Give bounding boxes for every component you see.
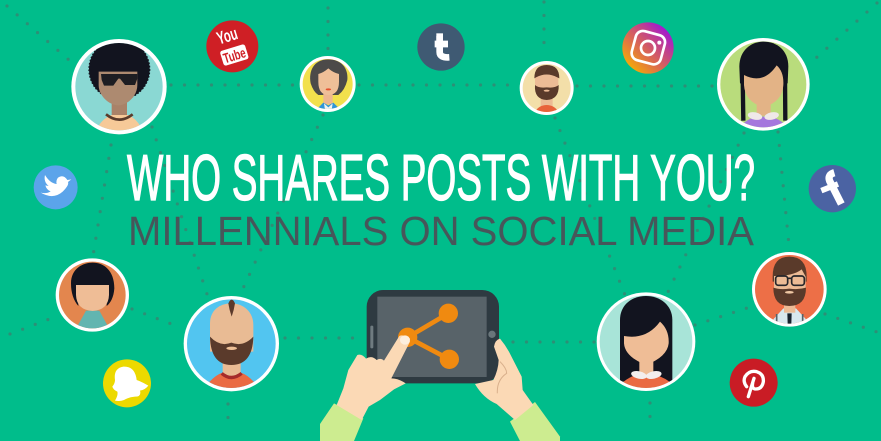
- tablet and hands: [320, 290, 560, 441]
- avatar: bearded man: [520, 61, 574, 117]
- avatar: woman with braids: [717, 38, 810, 133]
- icon: YouTube: [206, 20, 258, 72]
- avatars and icons, top-right group: [622, 22, 856, 212]
- subtitle: MILLENNIALS ON SOCIAL MEDIA: [128, 208, 755, 254]
- avatars and icon, lower-left group: [56, 258, 279, 407]
- icon: share symbol: [398, 304, 459, 369]
- icon: Twitter: [34, 165, 78, 209]
- tablet: [367, 290, 499, 383]
- avatar: bald man with beard: [184, 296, 279, 393]
- left hand: [320, 335, 410, 441]
- avatar: afro man with sunglasses: [71, 39, 167, 134]
- avatars and icons, top-left group: [34, 20, 258, 209]
- icon: Instagram: [622, 22, 674, 74]
- right hand: [475, 339, 560, 441]
- icon: Pinterest: [730, 359, 778, 407]
- avatar: woman with long black hair: [597, 292, 695, 393]
- avatar: woman with dark bob: [300, 56, 356, 115]
- avatar: hipster with glasses and beard: [752, 252, 827, 327]
- icon: Facebook: [809, 165, 856, 212]
- avatar: woman with black fringe: [56, 258, 129, 332]
- icon: YouTube: You: [214, 23, 240, 48]
- icon: Tumblr: [417, 23, 465, 71]
- icon: YouTube: Tube: [221, 44, 248, 66]
- avatars and icon, top-centre group: [300, 23, 574, 117]
- avatars and icon, lower-right group: [597, 252, 827, 407]
- icon: Snapchat: [103, 359, 151, 407]
